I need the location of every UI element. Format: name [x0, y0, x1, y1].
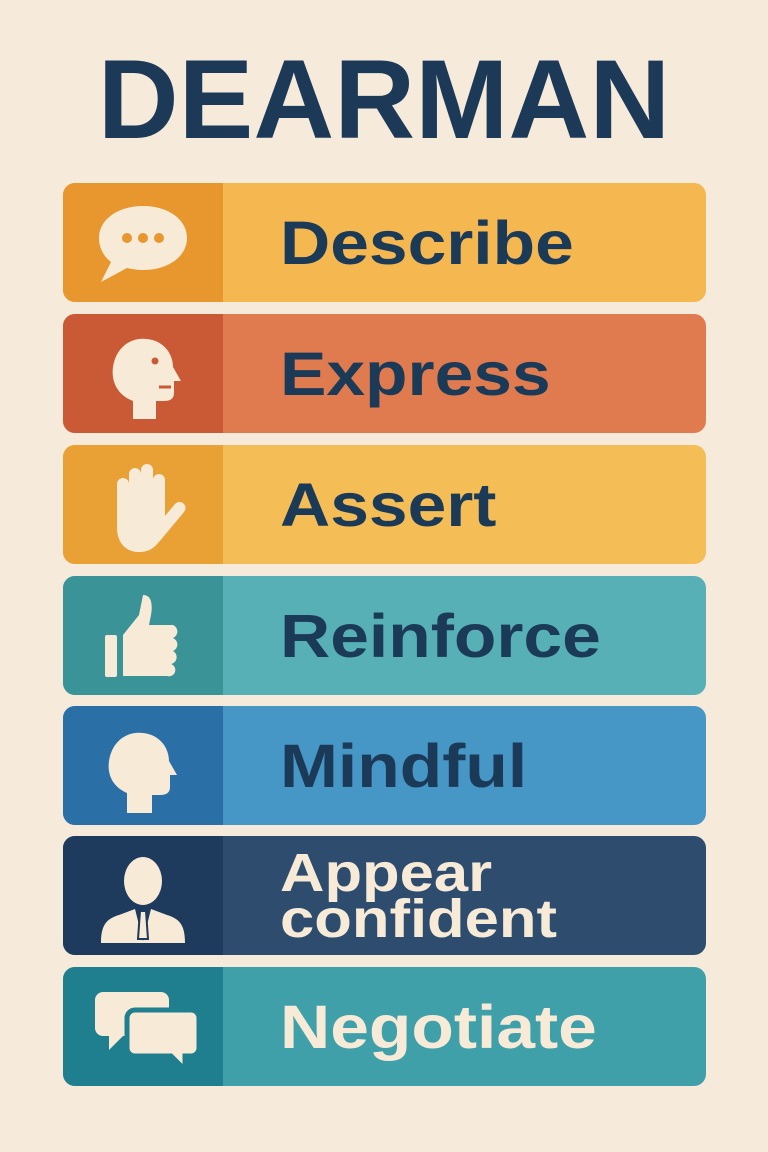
icon: hand	[63, 445, 223, 564]
label: Describe	[280, 208, 574, 276]
label: Negotiate	[280, 992, 597, 1060]
label: Express	[280, 340, 551, 408]
label: Mindful	[280, 732, 527, 800]
label	[280, 842, 557, 948]
icon: head	[63, 706, 223, 825]
panel: describe	[63, 183, 706, 302]
panel: negotiate	[63, 967, 706, 1086]
icon: two speech bubbles	[63, 967, 223, 1086]
label: Appear	[280, 842, 492, 902]
icon: person in suit	[63, 836, 223, 955]
icon: talking head	[63, 314, 223, 433]
panel: mindful	[63, 706, 706, 825]
panel: express	[63, 314, 706, 433]
icon: speech bubble	[63, 183, 223, 302]
panel: reinforce	[63, 576, 706, 695]
panel: assert	[63, 445, 706, 564]
label: Reinforce	[280, 602, 601, 670]
label: confident	[280, 888, 557, 948]
title: DEARMAN	[98, 37, 670, 162]
panel: appear confident	[63, 836, 706, 955]
icon: thumbs up	[63, 576, 223, 695]
label: Assert	[280, 470, 496, 538]
